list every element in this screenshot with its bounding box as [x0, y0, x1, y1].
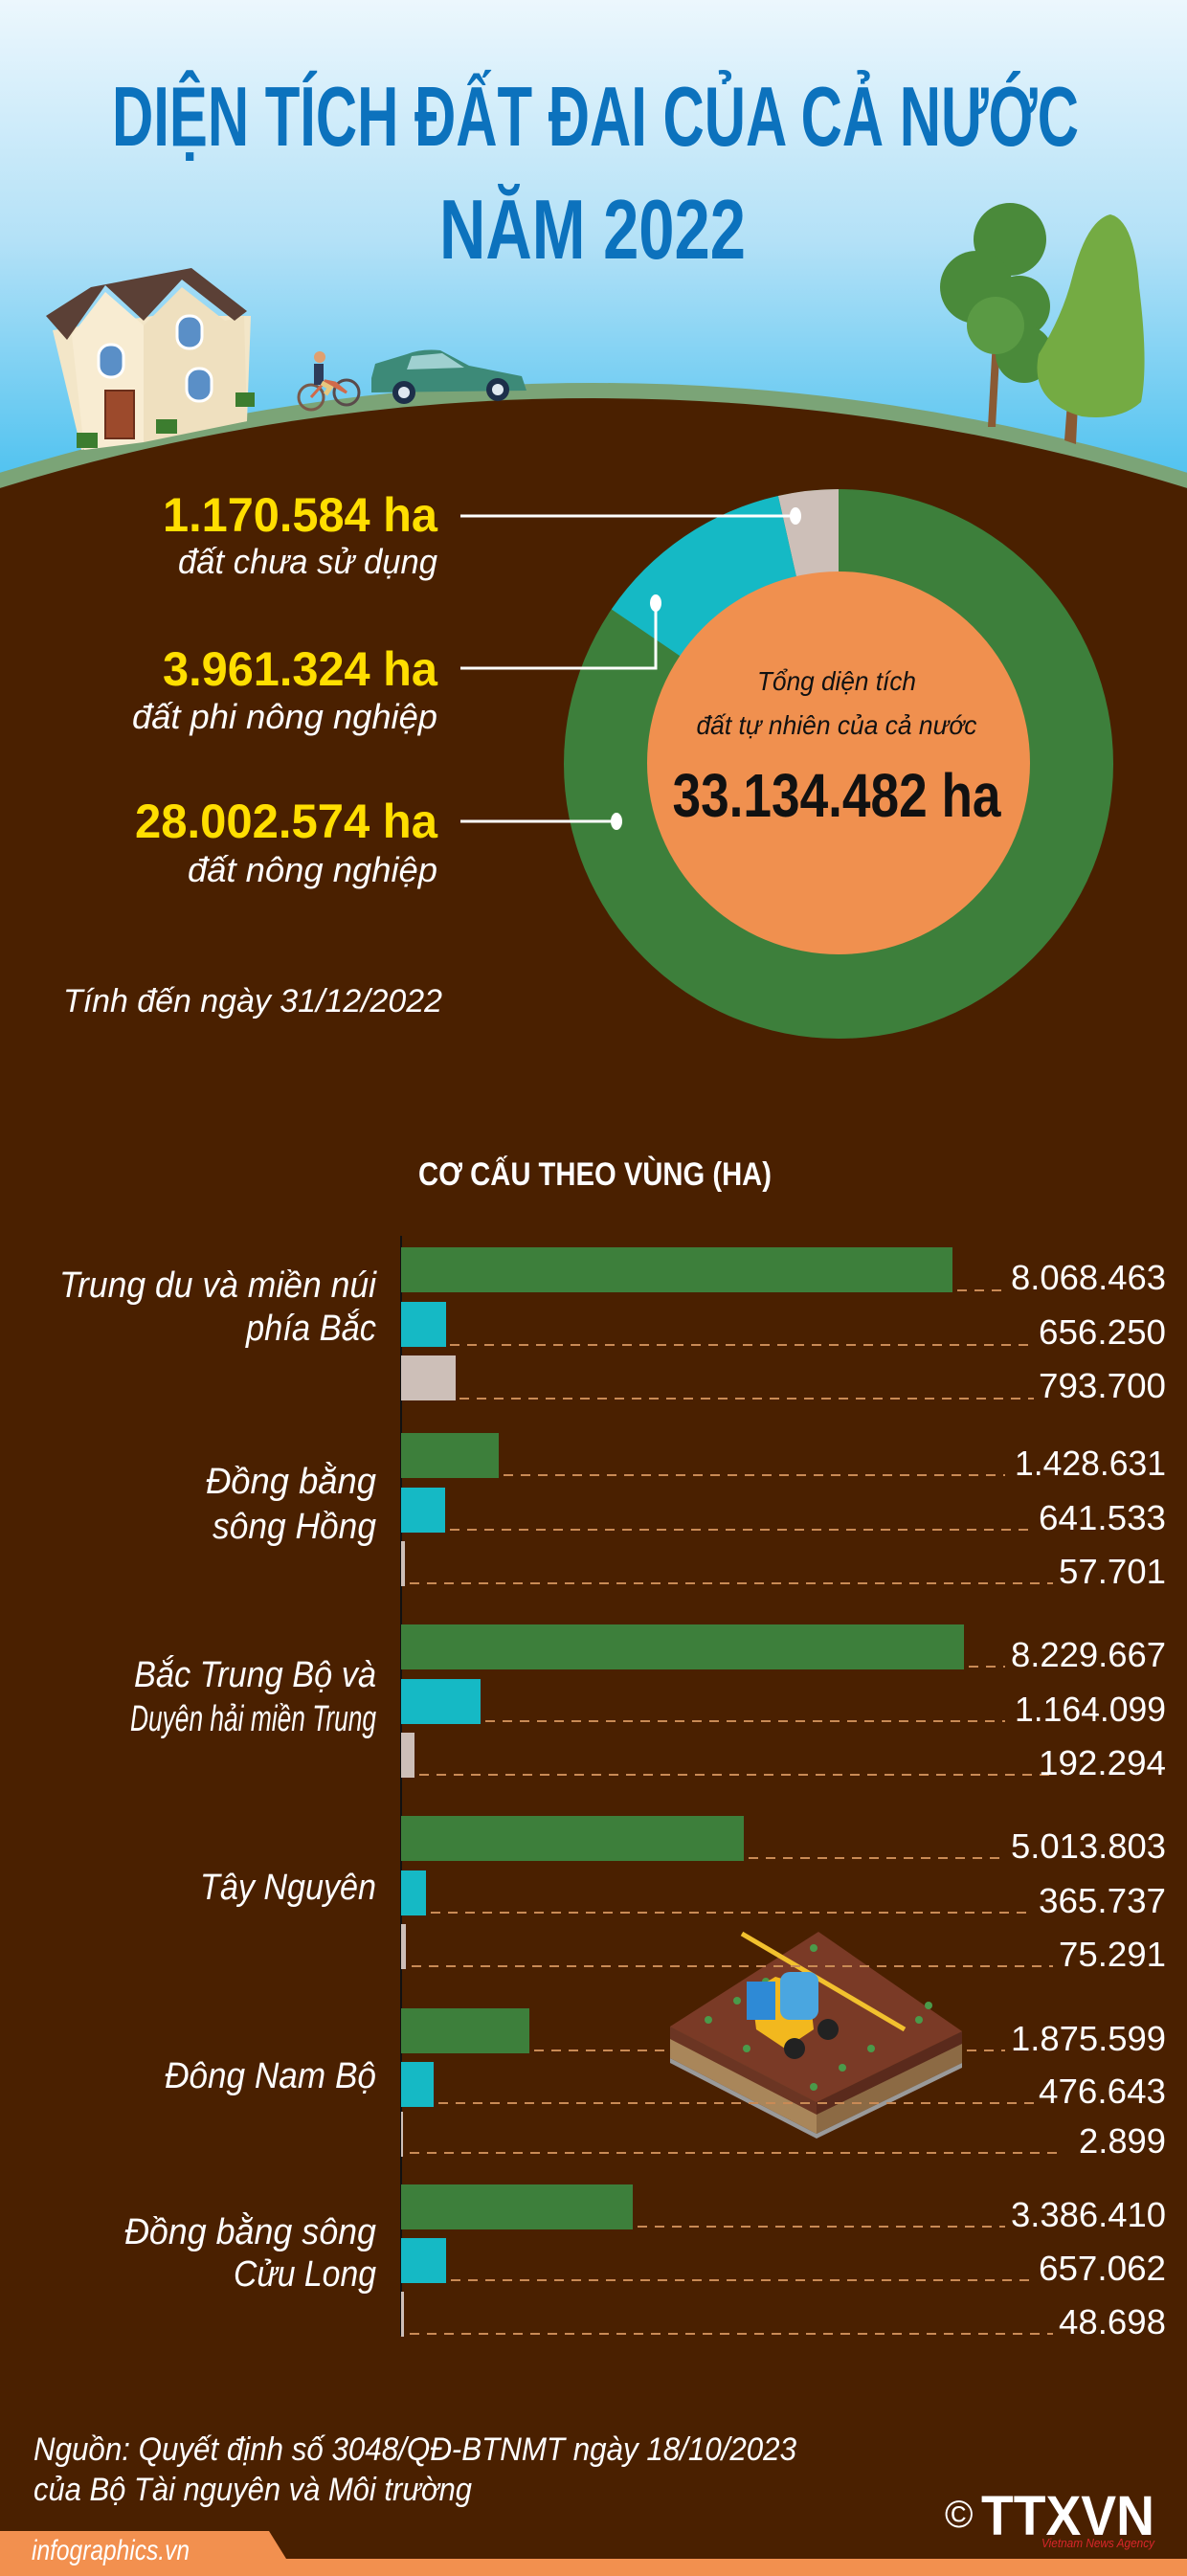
source note	[34, 2431, 796, 2508]
legend: non-agricultural land	[132, 642, 438, 736]
bar values: 75.291	[1059, 1935, 1166, 1974]
bar values: 641.533	[1039, 1498, 1166, 1537]
legend: unused land: đất chưa sử dụng	[178, 542, 437, 581]
chart heading: CƠ CẤU THEO VÙNG (HA)	[418, 1156, 772, 1193]
donut center text: 33.134.482 ha	[672, 761, 1001, 830]
logo: TTXVN: ©	[945, 2494, 973, 2536]
region labels: sông Hồng	[213, 1507, 376, 1547]
legend: agricultural land: đất nông nghiệp	[188, 850, 437, 889]
icon: tractor field	[670, 1932, 962, 2139]
bar values: 656.250	[1039, 1312, 1166, 1352]
footer band: infographics.vn	[32, 2535, 190, 2566]
region labels	[59, 1266, 377, 2295]
date note: Tính đến ngày 31/12/2022	[63, 983, 442, 1019]
axis line	[400, 1236, 402, 2336]
region labels: Cửu Long	[234, 2254, 376, 2295]
legend: unused land	[163, 488, 438, 581]
callout lines	[460, 507, 801, 830]
bar values: 2.899	[1079, 2121, 1166, 2161]
bar values	[1011, 1258, 1166, 2341]
source note: của Bộ Tài nguyên và Môi trường	[34, 2472, 472, 2508]
group: Trung du	[401, 1247, 952, 1400]
bar values: 1.875.599	[1011, 2019, 1166, 2058]
title: NĂM 2022	[439, 182, 746, 277]
region labels: Đông Nam Bộ	[165, 2056, 376, 2096]
ground hill	[0, 383, 1187, 536]
bar values: 5.013.803	[1011, 1826, 1166, 1866]
region labels: Trung du và miền núi	[59, 1266, 377, 1306]
bar values: 192.294	[1039, 1743, 1166, 1782]
source note: Nguồn: Quyết định số 3048/QĐ-BTNMT ngày 18/10/2023	[34, 2431, 796, 2468]
bar values: 1.428.631	[1015, 1444, 1166, 1483]
bar values: 3.386.410	[1011, 2195, 1166, 2234]
bar values: 365.737	[1039, 1881, 1166, 1920]
bar values: 1.164.099	[1015, 1690, 1166, 1729]
legend: agricultural land: 28.002.574 ha	[135, 795, 438, 848]
donut chart	[564, 489, 1113, 1039]
logo: TTXVN: Vietnam News Agency	[1041, 2536, 1155, 2550]
group: Dong Nam Bo	[401, 2008, 529, 2157]
group: Cuu Long	[401, 2184, 633, 2337]
group: Dong bang song Hong	[401, 1433, 499, 1586]
title	[112, 69, 1079, 277]
bar values: 8.229.667	[1011, 1635, 1166, 1674]
legend: non-agricultural land: đất phi nông nghiệp	[132, 697, 437, 736]
group: Tay Nguyen	[401, 1816, 744, 1969]
bar values: 57.701	[1059, 1552, 1166, 1591]
donut center text: Tổng diện tích	[757, 666, 916, 696]
bar chart	[401, 1247, 1063, 2337]
region labels: Tây Nguyên	[200, 1868, 376, 1908]
bar values: 48.698	[1059, 2302, 1166, 2341]
bar values: 657.062	[1039, 2249, 1166, 2288]
icon: trees	[940, 203, 1145, 444]
bar values: 793.700	[1039, 1366, 1166, 1405]
donut center text: đất tự nhiên của cả nước	[697, 710, 976, 740]
region labels: Bắc Trung Bộ và	[134, 1654, 376, 1695]
logo: TTXVN: TTXVN	[981, 2485, 1154, 2547]
region labels: Duyên hải miền Trung	[130, 1699, 376, 1739]
region labels: Đồng bằng	[206, 1461, 376, 1502]
legend: unused land: 1.170.584 ha	[163, 488, 438, 542]
bar values: 476.643	[1039, 2072, 1166, 2111]
icon: car	[371, 350, 526, 404]
bar values: 8.068.463	[1011, 1258, 1166, 1297]
group: Bac Trung Bo	[401, 1624, 964, 1778]
legend: agricultural land	[135, 795, 438, 889]
donut center text	[672, 666, 1001, 830]
region labels: phía Bắc	[245, 1308, 376, 1349]
icon: cyclist	[299, 351, 359, 410]
icon: house	[46, 268, 255, 450]
legend: non-agricultural land: 3.961.324 ha	[163, 642, 438, 696]
region labels: Đồng bằng sông	[124, 2211, 376, 2252]
footer band	[0, 2531, 1187, 2576]
